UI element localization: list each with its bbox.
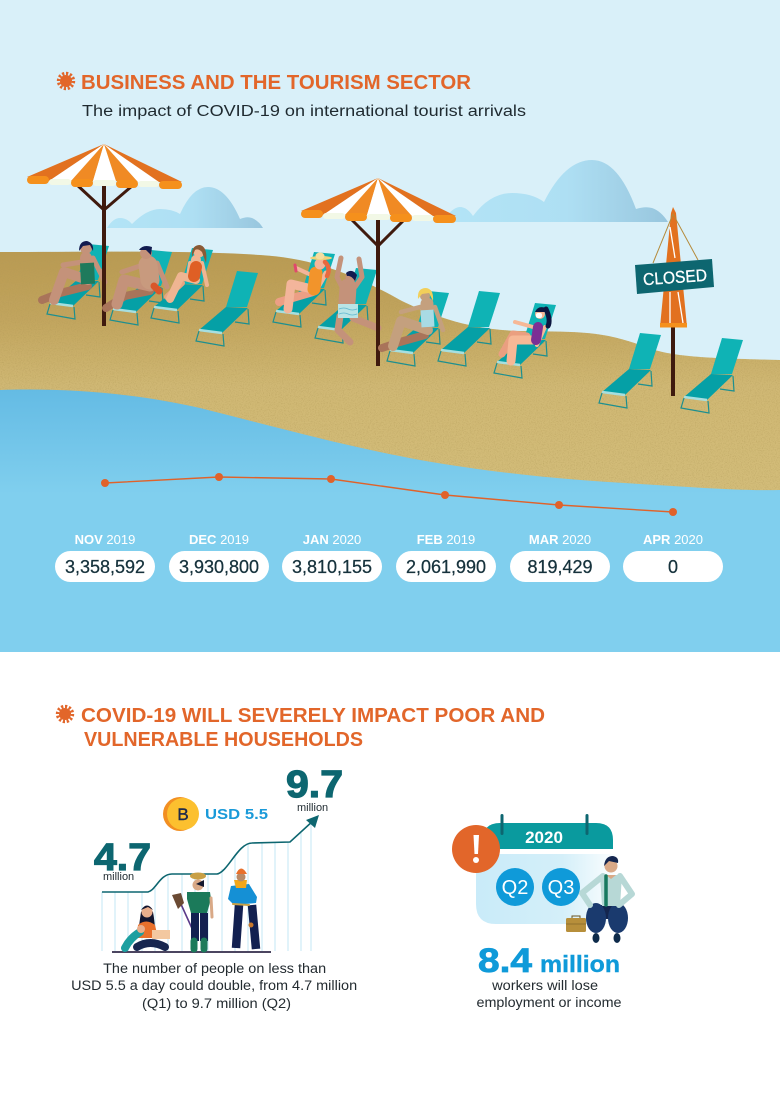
stat: 9.7 million: million — [297, 802, 328, 814]
quarter badge Q3: Q3 — [548, 877, 574, 899]
heading: VULNERABLE HOUSEHOLDS — [84, 729, 363, 751]
stat: 8.4 million: million — [540, 951, 620, 977]
quarter badge Q2 — [496, 868, 534, 906]
stat: 4.7 million: 4.7 — [94, 837, 151, 879]
caption: poverty: The number of people on less than — [103, 961, 326, 976]
lounger 3 — [151, 248, 213, 323]
caption: poverty: (Q1) to 9.7 million (Q2) — [142, 996, 291, 1011]
lounger 8 — [438, 291, 500, 366]
farmer with shovel — [172, 872, 212, 949]
subtitle: The impact of COVID-19 on international tourist arrivals — [82, 103, 526, 120]
alert icon — [452, 825, 500, 873]
lounger 5 — [273, 252, 335, 327]
sunbather: hat and cocktail — [279, 252, 332, 309]
heading: COVID-19 WILL SEVERELY IMPACT POOR AND — [81, 705, 545, 727]
lounger 4 — [196, 271, 258, 346]
data column: Apr 2020: 0 — [668, 557, 678, 577]
umbrella 1 — [27, 144, 182, 326]
data column: Nov 2019: 3,358,592 — [65, 557, 145, 577]
icon: burst — [58, 706, 72, 722]
umbrella 2 — [301, 178, 456, 366]
swimmer jumping, arms up — [337, 258, 378, 342]
lounger 2 — [110, 250, 172, 325]
briefcase — [566, 916, 586, 932]
sky background — [0, 0, 780, 652]
data column: Nov 2019: NOV 2019 — [75, 532, 135, 547]
lounger 1 — [47, 244, 109, 319]
lounger 6 — [315, 268, 377, 343]
stat: 9.7 million: 9.7 — [286, 764, 343, 806]
caption: workers: employment or income — [476, 995, 622, 1010]
sunbather: green swimsuit — [42, 241, 105, 300]
line chart: tourist arrivals — [101, 473, 677, 516]
data column: Mar 2020: MAR 2020 — [529, 532, 591, 547]
sunbather: orange shorts — [106, 246, 167, 308]
data column: Jan 2020: JAN 2020 — [303, 532, 361, 547]
data column: Dec 2019: DEC 2019 — [189, 532, 249, 547]
data column: Dec 2019 — [169, 532, 269, 582]
closed sign: CLOSED — [642, 266, 708, 289]
lounger 10 — [599, 333, 661, 408]
quarter badge Q2: Q2 — [502, 877, 528, 899]
lounger 7 — [387, 291, 449, 366]
data column: Apr 2020 — [623, 532, 723, 582]
sunbather: blonde — [382, 288, 443, 348]
cloud: right — [443, 160, 668, 222]
data column: Feb 2019: 2,061,990 — [406, 557, 486, 577]
caption: workers: workers will lose — [491, 978, 598, 993]
white lower panel — [0, 652, 780, 1102]
icon: burst — [58, 74, 74, 88]
stat: 8.4 million: 8.4 — [478, 942, 532, 980]
closed sign — [635, 259, 714, 294]
icon: coin: B — [177, 805, 189, 824]
data column: Nov 2019 — [55, 532, 155, 582]
sunbather: orange swimsuit — [167, 245, 207, 299]
loungers group — [47, 244, 743, 413]
beach sand — [0, 252, 780, 520]
caption: poverty: USD 5.5 a day could double, from 4.7 million — [71, 978, 357, 993]
lounger 9 — [494, 303, 556, 378]
sunbather: face mask — [502, 307, 549, 361]
section title: tourism — [58, 72, 472, 94]
data column: Jan 2020 — [282, 532, 382, 582]
lounger 11 — [681, 338, 743, 413]
stat: 4.7 million: million — [103, 871, 134, 883]
data column: Feb 2019 — [396, 532, 496, 582]
sea — [0, 390, 780, 652]
data column: Mar 2020 — [510, 532, 610, 582]
section title: households — [58, 705, 545, 751]
data column: Mar 2020: 819,429 — [527, 557, 593, 577]
quarter badge Q3 — [542, 868, 580, 906]
worker with hard hat — [228, 868, 257, 949]
woman and child — [125, 906, 170, 948]
growth chart — [102, 815, 319, 953]
stat: 8.4 million — [478, 942, 620, 980]
data column: Dec 2019: 3,930,800 — [179, 557, 259, 577]
calendar — [476, 814, 620, 924]
data column: Apr 2020: APR 2020 — [643, 532, 703, 547]
cloud: left — [107, 187, 263, 228]
data column: Feb 2019: FEB 2019 — [417, 532, 475, 547]
closed umbrella — [653, 207, 698, 396]
man sitting — [582, 856, 632, 943]
data column: Jan 2020: 3,810,155 — [292, 557, 372, 577]
label: USD 5.5: USD 5.5 — [205, 806, 268, 823]
heading: BUSINESS AND THE TOURISM SECTOR — [81, 72, 472, 94]
calendar year: 2020 — [525, 828, 563, 847]
icon: coin — [163, 797, 199, 831]
